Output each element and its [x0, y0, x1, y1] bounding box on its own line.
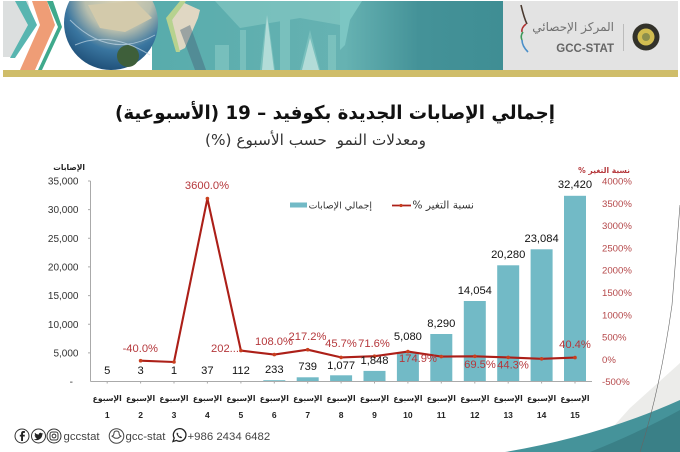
legend	[290, 200, 474, 212]
right axis: 4000%	[602, 176, 632, 188]
logo panel	[503, 1, 678, 70]
logo divider	[623, 24, 624, 51]
percent labels: 108.0%	[255, 336, 293, 348]
percent labels: 3600.0%	[185, 180, 229, 192]
combo chart	[48, 163, 632, 420]
week numbers: 11	[437, 410, 446, 420]
logo latin name: GCC-STAT	[556, 43, 614, 55]
week labels: الإسبوع	[293, 394, 322, 403]
left axis	[48, 176, 90, 388]
value labels: 1	[171, 365, 177, 377]
value labels: 739	[298, 361, 317, 373]
right axis: 0%	[602, 355, 616, 366]
icon: whatsapp	[173, 429, 186, 442]
logo ribbon	[521, 5, 528, 52]
bars	[263, 196, 586, 382]
right axis: 2000%	[602, 266, 632, 277]
week labels: الإسبوع	[494, 394, 523, 403]
week numbers: 9	[372, 410, 377, 420]
left axis: 30,000	[48, 205, 79, 216]
week labels: الإسبوع	[193, 394, 222, 403]
right axis: -500%	[602, 377, 630, 388]
week labels: الإسبوع	[93, 394, 122, 403]
week numbers	[105, 410, 580, 420]
title: إجمالي الإصابات الجديدة بكوفيد – 19 (الأسبوعية)	[115, 101, 555, 124]
header banner	[3, 0, 678, 77]
week labels: الإسبوع	[159, 394, 189, 403]
right axis: 3500%	[602, 199, 632, 210]
week numbers: 6	[272, 410, 277, 420]
week labels: الإسبوع	[260, 394, 289, 403]
value labels: 23,084	[524, 233, 559, 245]
percent labels: 69.5%	[464, 359, 496, 371]
week labels: الإسبوع	[360, 394, 389, 403]
left axis: 5,000	[53, 348, 79, 360]
x axis	[90, 382, 592, 384]
subtitle: ومعدلات النمو حسب الأسبوع (%)	[205, 130, 426, 149]
right axis: 1000%	[602, 310, 632, 321]
week labels: الإسبوع	[427, 394, 456, 403]
icon: snapchat	[109, 429, 124, 443]
right axis title: نسبة التغير %	[578, 166, 630, 175]
legend: نسبة التغير %	[412, 200, 474, 212]
footer social contacts	[15, 429, 270, 443]
percent labels: 174.9%	[399, 353, 437, 365]
handle: gccstat: gccstat	[64, 431, 100, 443]
week numbers: 10	[403, 410, 413, 420]
week numbers: 12	[470, 410, 480, 420]
logo arabic name: المركز الإحصائي	[532, 20, 614, 35]
week numbers: 7	[305, 410, 310, 420]
chevrons	[3, 1, 62, 70]
percent labels: 202...	[211, 343, 239, 355]
week labels	[93, 394, 590, 403]
week labels: الإسبوع	[560, 394, 590, 403]
right axis: 3000%	[602, 221, 632, 232]
gold band	[3, 70, 678, 77]
left axis: 15,000	[48, 291, 79, 302]
value labels	[104, 179, 592, 377]
value labels: 3	[137, 365, 144, 377]
week numbers: 13	[503, 410, 513, 420]
week labels: الإسبوع	[393, 394, 422, 403]
phone number: +986 2434 6482	[188, 431, 270, 443]
percent labels	[123, 180, 591, 372]
week labels: الإسبوع	[126, 394, 155, 403]
week labels: الإسبوع	[327, 394, 356, 403]
left axis: -	[70, 377, 73, 388]
percent labels: -40.0%	[123, 343, 158, 355]
value labels: 5	[104, 365, 110, 377]
logo emblem	[632, 24, 660, 50]
week numbers: 15	[570, 410, 580, 420]
value labels: 14,054	[458, 285, 492, 297]
handle: gcc-stat: gcc-stat	[126, 431, 166, 443]
left axis: 35,000	[48, 176, 79, 188]
left axis: 10,000	[48, 320, 79, 331]
icon: twitter	[32, 429, 46, 443]
value labels: 1,077	[327, 360, 355, 372]
right axis	[602, 176, 632, 388]
percent labels: 40.4%	[559, 339, 591, 351]
percent labels: 44.3%	[497, 360, 529, 372]
icon: facebook	[15, 429, 29, 443]
week numbers: 5	[239, 410, 244, 420]
value labels: 20,280	[491, 249, 525, 261]
week numbers: 1	[105, 410, 110, 420]
week numbers: 2	[138, 410, 143, 420]
value labels: 112	[232, 365, 250, 377]
week labels: الإسبوع	[527, 394, 556, 403]
week numbers: 8	[339, 410, 344, 420]
value labels: 32,420	[558, 179, 592, 191]
corner decoration	[505, 205, 680, 452]
globe	[64, 0, 158, 70]
week numbers: 4	[205, 410, 210, 420]
growth line	[139, 197, 577, 364]
icon: instagram	[47, 429, 61, 443]
week labels: الإسبوع	[460, 394, 489, 403]
week numbers: 14	[537, 410, 547, 420]
left axis: 20,000	[48, 262, 79, 274]
week labels: الإسبوع	[226, 394, 255, 403]
right axis: 500%	[602, 333, 627, 344]
left axis: 25,000	[48, 234, 79, 245]
value labels: 5,080	[394, 331, 422, 343]
percent labels: 217.2%	[289, 331, 327, 343]
percent labels: 45.7%	[325, 338, 357, 350]
left axis title: الإصابات	[53, 163, 85, 172]
right axis: 1500%	[602, 288, 632, 299]
skyline	[215, 1, 340, 70]
legend: إجمالي الإصابات	[309, 200, 372, 212]
value labels: 233	[265, 364, 284, 376]
percent labels: 71.6%	[358, 338, 390, 350]
week numbers: 3	[172, 410, 177, 420]
value labels: 1,848	[360, 355, 388, 367]
value labels: 8,290	[427, 318, 455, 330]
right axis: 2500%	[602, 243, 632, 254]
value labels: 37	[201, 365, 214, 377]
